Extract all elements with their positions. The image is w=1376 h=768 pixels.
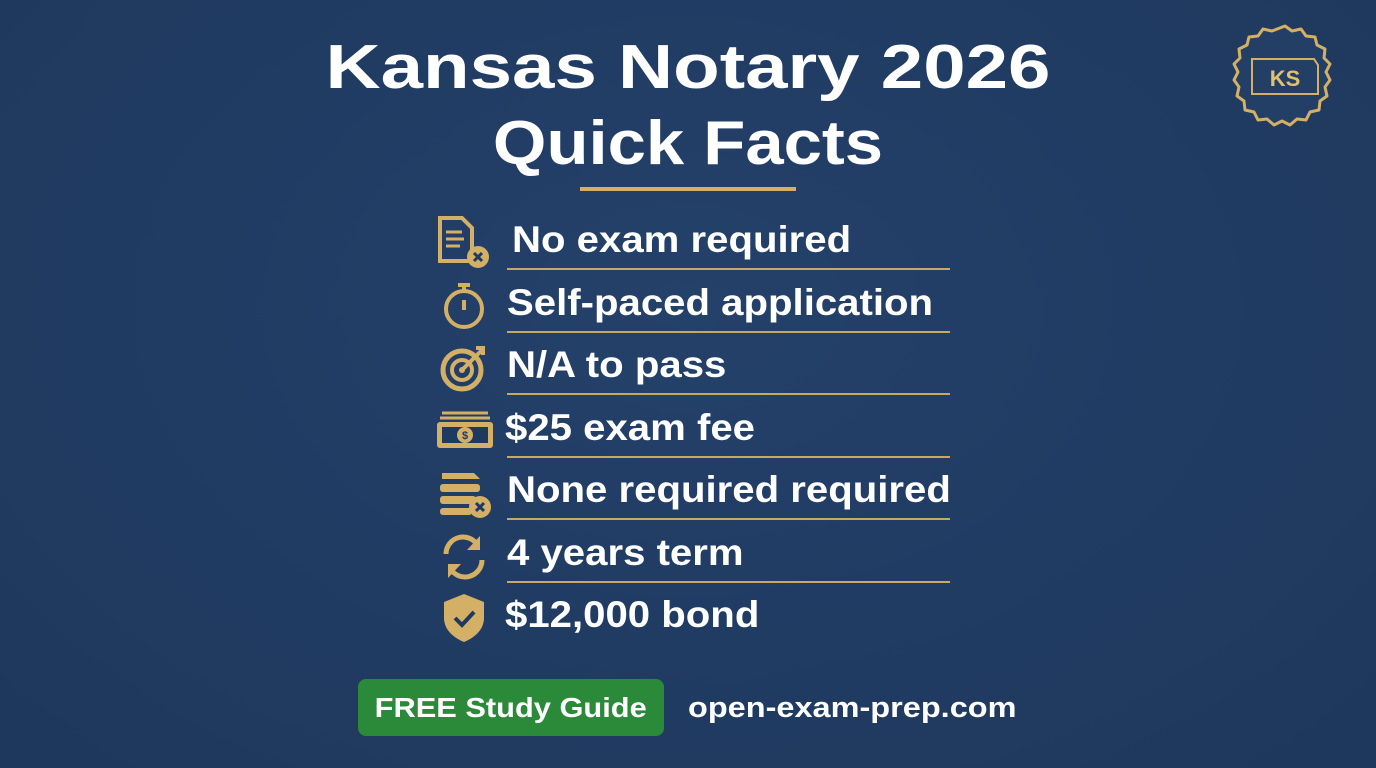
title: Kansas Notary 2026 bbox=[326, 33, 1050, 102]
list row: fee: $25 exam fee bbox=[505, 407, 755, 448]
list row: fee: $ bbox=[462, 430, 468, 442]
list row: fee bbox=[437, 407, 950, 458]
title bbox=[326, 33, 1050, 178]
list row: self-paced: Self-paced application bbox=[507, 282, 933, 323]
button: free study guide bbox=[358, 679, 664, 736]
list row: pass: N/A to pass bbox=[507, 344, 726, 385]
list row: pass bbox=[440, 344, 950, 395]
list row: training: None required required bbox=[507, 469, 951, 510]
list row: term bbox=[444, 532, 950, 583]
badge: KS: KS bbox=[1270, 66, 1300, 91]
list row: no exam: No exam required bbox=[512, 219, 851, 260]
url: open-exam-prep.com bbox=[688, 692, 1016, 724]
list row: bond bbox=[444, 594, 759, 642]
list row: bond: $12,000 bond bbox=[505, 594, 759, 635]
list row: no exam bbox=[438, 216, 950, 270]
list row: self-paced bbox=[444, 282, 950, 333]
button: free study guide: FREE Study Guide bbox=[375, 692, 647, 723]
list row: term: 4 years term bbox=[507, 532, 744, 573]
badge: KS bbox=[1232, 24, 1332, 126]
list row: training bbox=[440, 469, 951, 520]
title: Quick Facts bbox=[493, 109, 883, 178]
